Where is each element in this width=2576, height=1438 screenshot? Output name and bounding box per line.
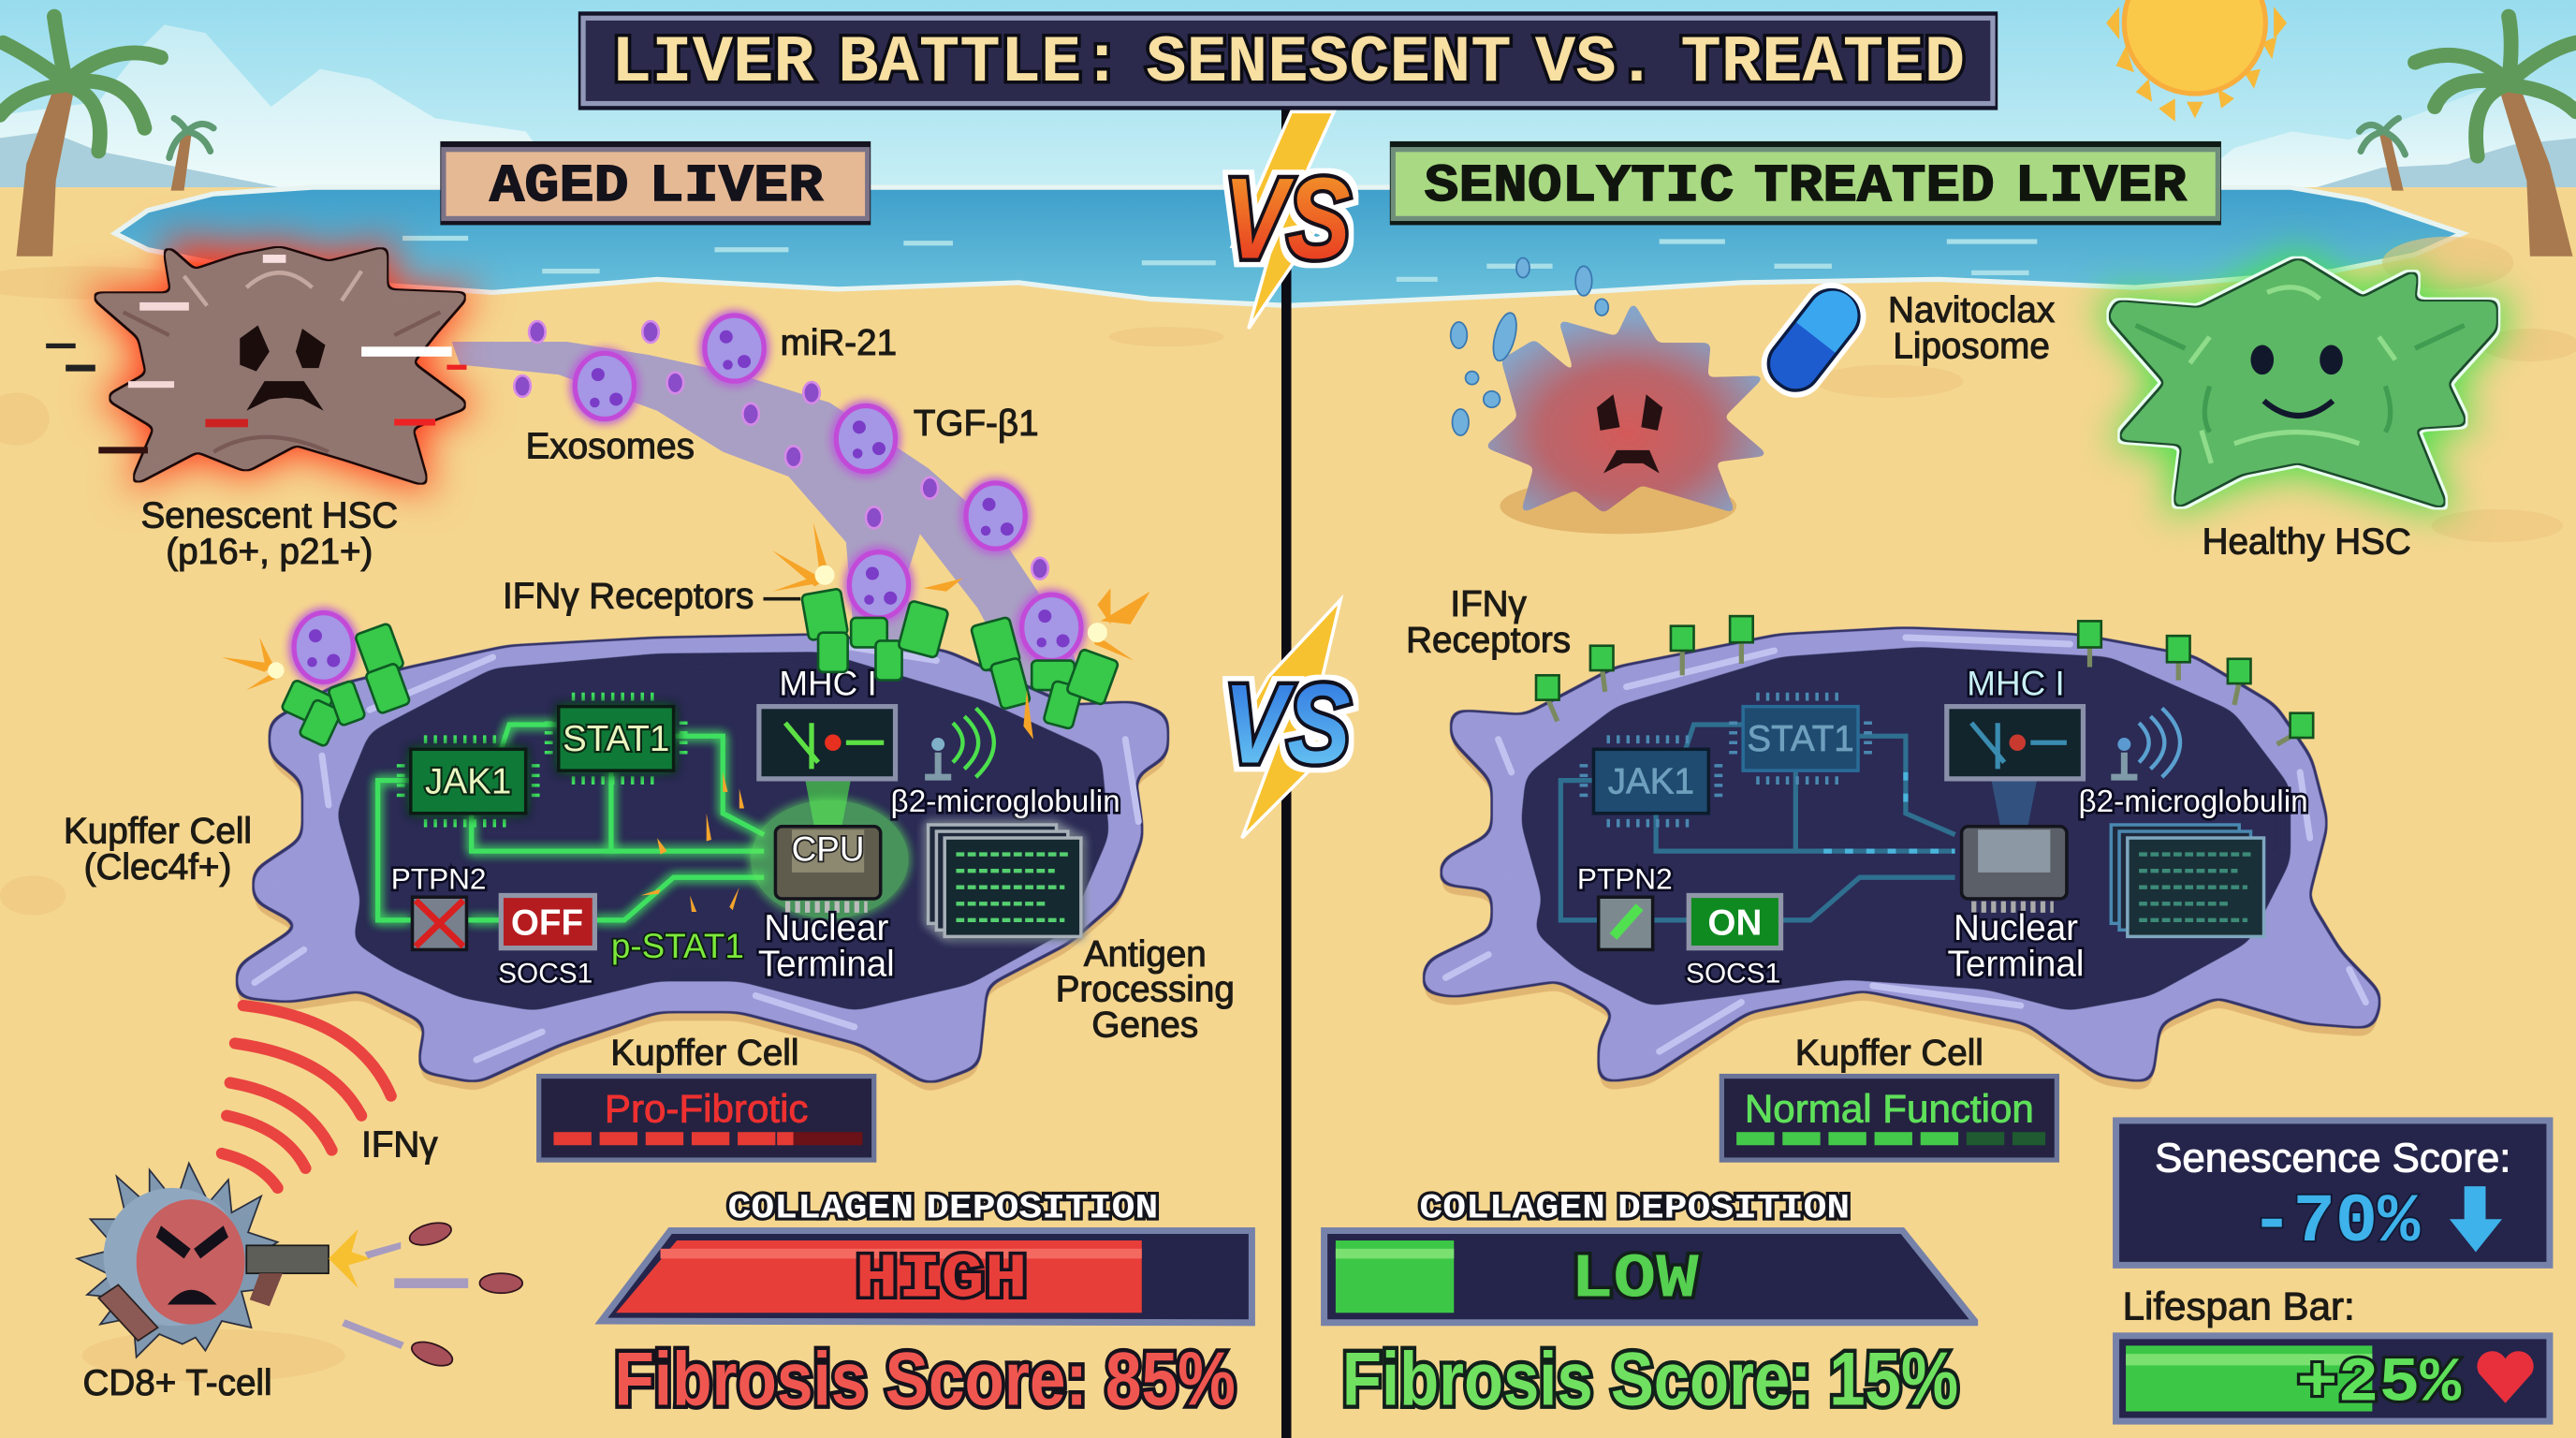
label: antigen processing genes: Genes	[1091, 1005, 1198, 1045]
SOCS1 ON switch: ON	[1707, 903, 1762, 944]
IFNγ receptors right	[1536, 616, 2313, 744]
cell membrane	[238, 636, 1166, 1083]
sparks	[640, 772, 744, 912]
title banner: LIVER BATTLE: SENESCENT VS. TREATED	[611, 27, 1965, 101]
gun	[246, 1229, 372, 1306]
VS lightning bottom	[1224, 600, 1351, 838]
label: IFNγ receptors: IFNγ Receptors —	[503, 576, 800, 616]
background: clouds and hills left	[0, 24, 567, 187]
icon: PTPN2 active	[1599, 897, 1653, 949]
heading: aged liver	[440, 141, 871, 225]
label: lifespan bar: Lifespan Bar:	[2123, 1284, 2355, 1328]
label: nuclear terminal: Nuclear	[764, 908, 888, 948]
centre divider	[1281, 98, 1292, 1438]
panel: senescence score: Senescence Score:	[2155, 1135, 2510, 1181]
sun	[2106, 0, 2287, 122]
label: Kupffer cell left: Kupffer Cell	[610, 1033, 798, 1073]
sad face	[240, 325, 326, 411]
panel: senescence score	[2116, 1121, 2550, 1265]
label: CD8+ T-cell: CD8+ T-cell	[83, 1363, 272, 1403]
antigen gene pages	[929, 825, 1081, 936]
receptors left with sparks	[222, 522, 1150, 747]
cell interior	[337, 653, 1109, 1010]
chip: STAT1	[1734, 697, 1868, 781]
cell shadow	[1423, 639, 2380, 1091]
Kupffer cell right	[1423, 629, 2380, 1091]
label: miR-21: miR-21	[781, 323, 897, 363]
exosome cargo dots	[590, 330, 1070, 647]
star body	[91, 244, 468, 485]
heading: senolytic treated liver	[1390, 141, 2221, 225]
label: navitoclax liposome: Liposome	[1893, 327, 2050, 367]
background: clouds and hills right	[2185, 91, 2576, 187]
VS lightning bottom: VS	[1224, 662, 1351, 786]
label: nuclear terminal: Terminal	[758, 944, 895, 984]
chip: JAK1	[1584, 740, 1719, 823]
shading	[2136, 287, 2465, 463]
status: normal function: Normal Function	[1745, 1087, 2034, 1131]
icon: antenna	[2111, 708, 2180, 777]
CD8+ T-cell	[77, 1164, 372, 1357]
label: navitoclax liposome: Navitoclax	[1888, 290, 2055, 330]
beam MHC to CPU	[805, 779, 851, 829]
status: pro-fibrotic: Pro-Fibrotic	[605, 1087, 809, 1131]
happy face	[2250, 345, 2343, 416]
droplets	[1451, 258, 1608, 435]
angry face	[156, 1225, 228, 1304]
label: collagen deposition right: COLLAGEN DEPOSITION	[1419, 1189, 1850, 1228]
collagen bar: high	[601, 1231, 1251, 1323]
face	[1597, 394, 1662, 473]
collagen bar: high: HIGH	[856, 1245, 1028, 1316]
collagen bar: low: LOW	[1571, 1245, 1699, 1316]
label: antigen processing genes: Antigen	[1084, 934, 1207, 975]
label: antigen processing genes: Processing	[1056, 970, 1235, 1010]
icon: antenna	[925, 708, 994, 777]
background: sand patches	[0, 237, 2576, 1382]
cell membrane	[1423, 629, 2380, 1081]
label: SOCS1: SOCS1	[498, 959, 593, 990]
chip: STAT1: STAT1	[1747, 719, 1854, 759]
chip: STAT1: STAT1	[563, 719, 669, 759]
palm tree small left	[169, 118, 213, 191]
membrane highlights	[255, 642, 1138, 1060]
lifespan bar	[2116, 1336, 2550, 1421]
weakened HSC	[1451, 258, 1767, 534]
status: pro-fibrotic	[539, 1077, 874, 1160]
palm tree left	[0, 17, 161, 257]
chip: JAK1: JAK1	[1608, 762, 1694, 802]
label: senescent HSC: Senescent HSC	[140, 495, 398, 536]
VS lightning top: VS	[1224, 155, 1351, 284]
label: collagen deposition left: COLLAGEN DEPOSITION	[728, 1189, 1158, 1228]
arm	[98, 1284, 157, 1341]
fibrosis score left: Fibrosis Score: 85%	[614, 1338, 1236, 1422]
beam MHC to CPU	[1991, 779, 2037, 829]
exosomes	[575, 315, 1081, 661]
label: senescent HSC: (p16+, p21+)	[166, 532, 373, 572]
small exosome dots	[514, 321, 1048, 580]
label: Kupffer cell Clec4f: Kupffer Cell	[64, 811, 252, 851]
collagen bar: low	[1325, 1231, 1975, 1323]
lifespan bar: +25%	[2297, 1348, 2462, 1419]
membrane highlights	[1445, 638, 2365, 1051]
label: IFNγ receptors right: Receptors	[1406, 621, 1571, 661]
label: MHC I: MHC I	[1967, 664, 2065, 702]
panel: senescence score: -70%	[2250, 1184, 2421, 1262]
SOCS1 OFF switch: OFF	[511, 903, 583, 944]
label: β2-microglobulin: β2-microglobulin	[891, 785, 1120, 819]
healthy HSC	[2100, 250, 2506, 518]
title banner	[578, 11, 1998, 110]
red glow	[79, 238, 479, 493]
label: Kupffer cell Clec4f: (Clec4f+)	[84, 847, 231, 888]
icon: heart	[2477, 1351, 2534, 1403]
chip: JAK1: JAK1	[425, 762, 511, 802]
VS lightning top	[1224, 111, 1351, 329]
background: sea	[115, 187, 2463, 305]
label: healthy HSC: Healthy HSC	[2203, 521, 2411, 562]
label: PTPN2: PTPN2	[391, 861, 487, 895]
bullets	[342, 1219, 522, 1371]
MHC I monitor	[759, 707, 896, 779]
cell interior	[1521, 647, 2291, 1010]
CPU chip	[1962, 827, 2067, 907]
label: SOCS1: SOCS1	[1686, 959, 1780, 990]
label: IFNγ receptors right: IFNγ	[1450, 584, 1528, 624]
label: nuclear terminal: Nuclear	[1954, 908, 2078, 948]
glitch strips	[46, 255, 466, 453]
heading: senolytic treated liver: SENOLYTIC TREATED LIVER	[1425, 156, 2187, 216]
SOCS1 ON switch	[1689, 895, 1781, 948]
CPU glow	[751, 800, 909, 918]
CPU chip: CPU	[792, 830, 864, 869]
shading	[124, 271, 440, 452]
chip: STAT1	[549, 697, 683, 781]
label: IFNγ: IFNγ	[361, 1125, 438, 1166]
label: exosomes: Exosomes	[526, 427, 695, 467]
cell shadow	[238, 646, 1166, 1093]
icon: navitoclax pill	[1749, 271, 1878, 409]
icon: down arrow	[2450, 1186, 2502, 1252]
IFNγ waves	[222, 1005, 391, 1188]
label: MHC I: MHC I	[779, 664, 877, 702]
icon: PTPN2 disabled	[413, 897, 466, 949]
signal circuit	[378, 725, 764, 920]
antigen gene pages	[2111, 825, 2264, 936]
senescent HSC	[46, 238, 479, 493]
label: β2-microglobulin: β2-microglobulin	[2078, 785, 2308, 819]
background: sky	[0, 0, 2576, 198]
label: TGF-β1: TGF-β1	[914, 404, 1039, 444]
status: normal function	[1721, 1077, 2056, 1160]
CPU chip	[775, 827, 881, 907]
chip: JAK1	[401, 740, 535, 823]
label: nuclear terminal: Terminal	[1948, 944, 2084, 984]
fibrosis score right: Fibrosis Score: 15%	[1342, 1338, 1958, 1422]
SOCS1 OFF switch	[501, 895, 594, 948]
background: wave highlights	[402, 238, 2037, 279]
MHC I monitor	[1947, 707, 2083, 779]
exosome bound at left receptor	[294, 613, 353, 682]
palm tree right	[2415, 17, 2576, 257]
label: PTPN2: PTPN2	[1577, 861, 1673, 895]
heading: aged liver: AGED LIVER	[490, 156, 824, 216]
label: p-STAT1: p-STAT1	[611, 927, 744, 965]
spikes	[77, 1164, 278, 1357]
label: Kupffer cell right: Kupffer Cell	[1795, 1033, 1983, 1073]
exosome stream	[452, 342, 1092, 698]
signal circuit	[1560, 725, 1955, 920]
Kupffer cell left	[238, 636, 1166, 1093]
palm tree small right	[2359, 118, 2405, 191]
